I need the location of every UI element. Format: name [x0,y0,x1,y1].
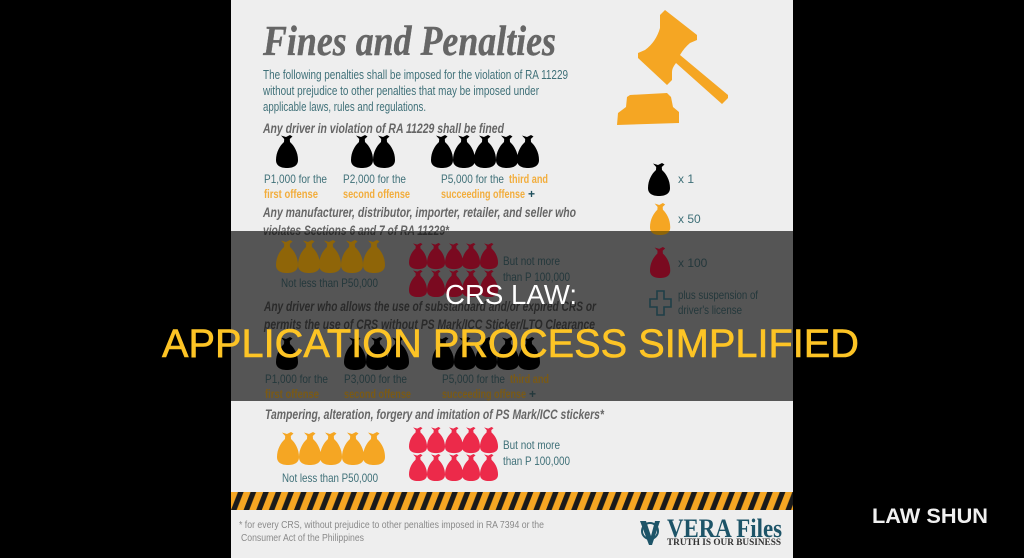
legend: black bag x 1: x 1 [678,172,694,186]
heading: driver in violation: Any driver in violation of RA 11229 shall be fined [262,121,505,136]
intro paragraph [262,67,568,114]
black bags: first row [276,135,539,168]
red bags: tampering maximum [409,427,498,481]
fine labels: substandard CRS: P3,000 for the [344,372,407,386]
fine labels: manufacturer: But not more [503,254,560,268]
brand: LAW SHUN: LAW SHUN [872,505,988,528]
fine labels: driver violation: P5,000 for the [441,172,504,186]
legend: orange bag x 50: x 50 [678,212,701,226]
footnote: * for every CRS, without prejudice to other penalties imposed in RA 7394 or the [239,519,544,531]
footnote [239,519,544,544]
logo: VERA Files: VERA Files [667,514,782,543]
fine labels: substandard CRS: third and [510,372,549,386]
orange bags: tampering minimum [277,432,385,465]
fine labels: substandard CRS: P1,000 for the [265,372,328,386]
red bags: manufacturer maximum [409,243,498,297]
fine labels: manufacturer [281,254,570,290]
legend: black bag x 1 [648,163,694,196]
fine labels: driver violation: P2,000 for the [343,172,406,186]
intro paragraph: applicable laws, rules and regulations. [263,99,426,114]
heading: substandard CRS: permits the use of CRS without PS Mark/ICC Sticker/LTO Clearance [263,317,595,332]
legend: red bag x 100 [650,247,708,278]
fine labels: substandard CRS: + [529,387,536,401]
fine labels: driver violation: third and [509,172,548,186]
legend: suspension cross: plus suspension of [678,288,759,302]
intro paragraph: without prejudice to other penalties that may be imposed under [262,83,540,98]
fine labels: driver violation: succeeding offense [441,187,525,201]
fine labels: tampering: Not less than P50,000 [282,471,378,485]
infographic panel background [231,0,793,558]
heading: manufacturer part one: Any manufacturer, distributor, importer, retailer, and seller who [262,205,576,220]
legend: red bag x 100: x 100 [678,256,708,270]
logo: VERA Files: TRUTH IS OUR BUSINESS [667,538,781,548]
heading: substandard CRS: Any driver who allows the use of substandard and/or expired CRS or [263,299,597,314]
fine labels: substandard CRS [265,372,549,401]
heading: tampering: Tampering, alteration, forgery and imitation of PS Mark/ICC stickers* [265,407,605,422]
fine labels: driver violation: + [528,187,535,201]
legend: suspension cross [650,288,759,317]
fine labels: tampering [282,438,570,485]
orange bags: manufacturer minimum [276,240,385,273]
fine labels: manufacturer: Not less than P50,000 [281,276,378,290]
intro paragraph: The following penalties shall be imposed for the violation of RA 11229 [263,67,568,82]
black bags: third row [276,337,540,370]
title: Fines and Penalties: Fines and Penalties [262,19,556,65]
legend: suspension cross: driver's license [678,303,742,317]
footnote: Consumer Act of the Philippines [241,532,364,544]
icon: gavel [617,10,728,125]
fine labels: driver violation [264,172,548,201]
fine labels: manufacturer: than P 100,000 [503,270,570,284]
fine labels: tampering: But not more [503,438,560,452]
fine labels: substandard CRS: succeeding offense [442,387,526,401]
fine labels: tampering: than P 100,000 [503,454,570,468]
fine labels: substandard CRS: P5,000 for the [442,372,505,386]
logo: VERA Files [640,514,782,548]
fine labels: driver violation: P1,000 for the [264,172,327,186]
headline: CRS LAW: CRS LAW: [445,279,577,310]
heading: substandard CRS [263,299,597,332]
heading: manufacturer part two: violates Sections 6 and 7 of RA 11229* [263,223,450,238]
fine labels: driver violation: second offense [343,187,410,201]
dark title band [231,231,793,401]
legend: orange bag x 50 [650,203,701,235]
fine labels: substandard CRS: first offense [265,387,319,401]
fine labels: driver violation: first offense [264,187,318,201]
hazard stripe divider [231,492,793,510]
headline: application process simplified: APPLICATION PROCESS SIMPLIFIED [162,322,859,366]
fine labels: substandard CRS: second offense [344,387,411,401]
